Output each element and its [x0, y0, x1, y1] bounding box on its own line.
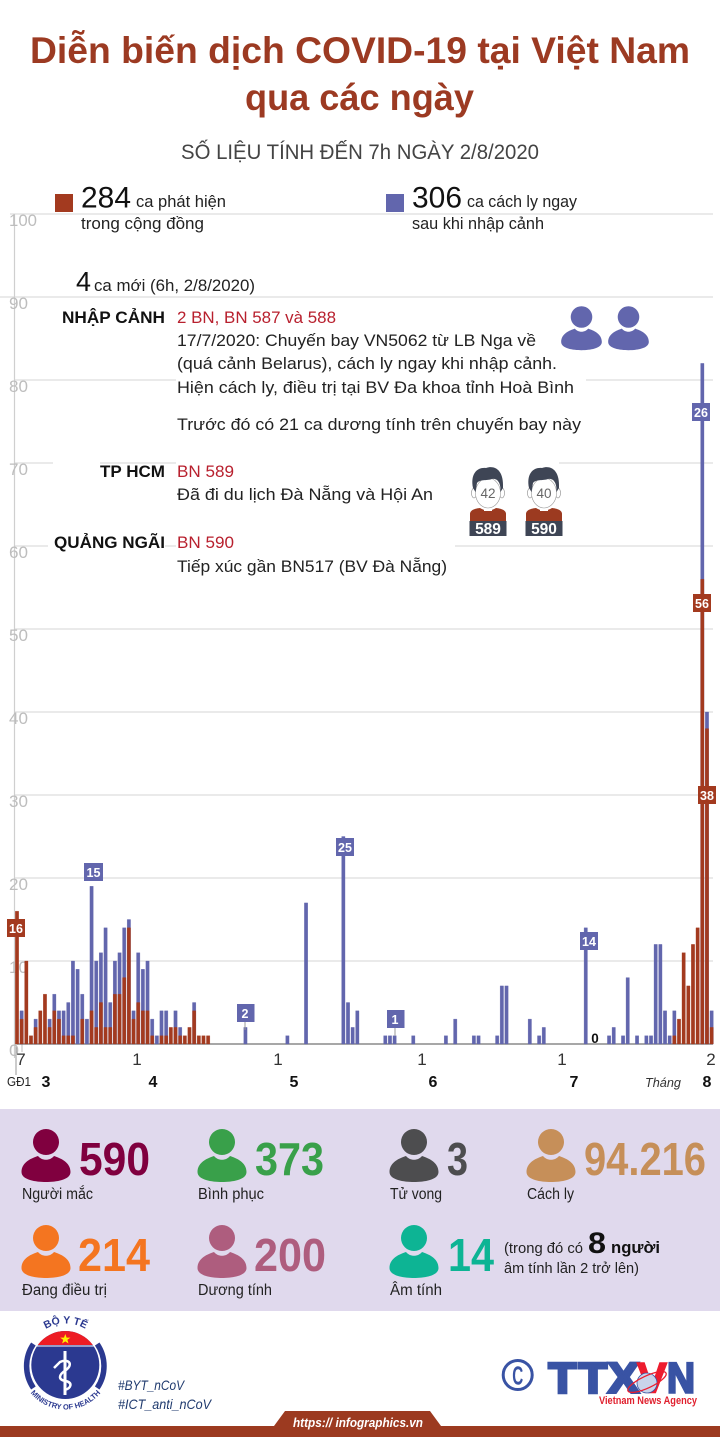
x axis day labels: 2 [706, 1050, 716, 1069]
block: Quang Ngai case: BN 590 [177, 533, 234, 552]
value tag: 26 [692, 403, 710, 421]
x axis month labels [7, 1074, 712, 1091]
legend: community cases: 284 [81, 182, 131, 214]
note: negative twice or more: (trong đó có [504, 1240, 583, 1257]
block: Ho Chi Minh City case: Đã đi du lịch Đà Nẵng và Hội An [177, 485, 433, 504]
x axis month labels: 6 [429, 1074, 438, 1091]
stat: quarantined [526, 1129, 706, 1203]
block: Ho Chi Minh City case [100, 462, 433, 504]
value tag: 15: 15 [87, 866, 100, 880]
stat: under treatment: 214 [78, 1229, 150, 1281]
logo: TTXVN copyright mark [503, 1360, 532, 1390]
note: negative twice or more: âm tính lần 2 trở lên) [504, 1260, 639, 1277]
value label: 0: 0 [591, 1031, 599, 1046]
block: imported cases: NHẬP CẢNH [62, 308, 165, 327]
new cases heading [76, 266, 255, 297]
legend: quarantined on arrival: 306 [412, 182, 462, 214]
logo: TTXVN: X [608, 1354, 639, 1402]
icon: patient 590: 40 [536, 486, 552, 501]
value tag: 25 [336, 838, 354, 856]
bars: quarantined on arrival (blue) [20, 363, 713, 1044]
block: imported cases: (quá cảnh Belarus), cách ly ngay khi nhập cảnh. [177, 354, 557, 373]
value tag: 15 [84, 863, 103, 881]
logo: TTXVN: Vietnam News Agency [599, 1395, 698, 1407]
x axis day labels [16, 1050, 716, 1069]
block: imported cases: 2 BN, BN 587 và 588 [177, 308, 336, 327]
legend: community cases: ca phát hiện [136, 192, 226, 211]
block: Quang Ngai case: Tiếp xúc gần BN517 (BV Đà Nẵng) [177, 557, 447, 576]
logo: TTXVN: V [637, 1354, 667, 1402]
stat: infected [22, 1129, 150, 1203]
stat: deaths: Tử vong [390, 1186, 442, 1203]
value tag: 56 [693, 594, 711, 612]
value tag: 1: 1 [392, 1013, 399, 1027]
value tag: 2: 2 [242, 1007, 249, 1021]
note: negative twice or more: người [611, 1238, 660, 1257]
x axis month labels: GĐ1 [7, 1075, 31, 1089]
y axis labels: 100 [9, 211, 37, 230]
new cases heading: 4 [76, 266, 91, 297]
icon: patient 589: 42 [480, 486, 496, 501]
logo: TTXVN copyright mark: C [512, 1360, 523, 1390]
y axis labels: 60 [9, 543, 28, 562]
legend: quarantined on arrival: ca cách ly ngay [467, 192, 577, 211]
y axis labels: 80 [9, 377, 28, 396]
new cases heading: ca mới (6h, 2/8/2020) [94, 276, 255, 295]
stat: recovered: Bình phục [198, 1186, 264, 1203]
stat: quarantined: Cách ly [527, 1186, 574, 1203]
logo: Ministry of Health [24, 1315, 107, 1410]
icon: patient 589 [470, 467, 506, 538]
x axis day labels: 1 [557, 1050, 567, 1069]
note: negative twice or more [504, 1227, 660, 1277]
stat: positive: 200 [254, 1229, 326, 1281]
y axis labels: 90 [9, 294, 28, 313]
bars: detected in community (red) [15, 579, 713, 1044]
value tag: 38: 38 [700, 789, 714, 803]
legend: community cases [55, 182, 226, 233]
value tag: 16 [7, 919, 25, 937]
value tag: 2 [237, 1004, 254, 1030]
footer bar [0, 1411, 720, 1437]
x axis month labels: 4 [149, 1074, 158, 1091]
block: Quang Ngai case: QUẢNG NGÃI [54, 532, 165, 552]
logo: TTXVN: T [548, 1354, 576, 1402]
baseline [17, 1043, 713, 1045]
value tag: 16: 16 [9, 922, 23, 936]
footer bar: https:// infographics.vn [293, 1415, 423, 1430]
icon: patient 590: 590 [531, 521, 557, 538]
icon: patient 589: 589 [475, 521, 501, 538]
x axis month labels: Tháng [645, 1075, 682, 1090]
title: qua các ngày [245, 77, 474, 118]
x axis day labels: 1 [273, 1050, 283, 1069]
x axis month labels: 7 [570, 1074, 579, 1091]
note: negative twice or more: 8 [588, 1227, 606, 1260]
legend: quarantined on arrival [386, 182, 577, 233]
stat: deaths [390, 1129, 468, 1203]
block: Ho Chi Minh City case: TP HCM [100, 462, 165, 481]
y axis labels: 40 [9, 709, 28, 728]
hashtags: #ICT_anti_nCoV [118, 1396, 212, 1412]
block: Ho Chi Minh City case: BN 589 [177, 462, 234, 481]
y axis labels [9, 211, 37, 1060]
icon: patient 590 [526, 467, 562, 538]
logo: TTXVN: N [667, 1354, 695, 1402]
y axis labels: 30 [9, 792, 28, 811]
stat: negative: 14 [448, 1229, 494, 1281]
stat: under treatment [22, 1225, 150, 1299]
stat: positive [198, 1225, 326, 1299]
x axis day labels: 1 [417, 1050, 427, 1069]
x axis day labels: 7 [16, 1050, 26, 1069]
stat: deaths: 3 [447, 1133, 468, 1185]
legend: community cases: trong cộng đồng [81, 214, 204, 233]
x axis month labels: 8 [703, 1074, 712, 1091]
hashtags: #BYT_nCoV [118, 1377, 185, 1393]
y axis labels: 0 [9, 1041, 19, 1060]
y axis labels: 50 [9, 626, 28, 645]
value tag: 1 [387, 1010, 404, 1036]
stat: positive: Dương tính [198, 1282, 272, 1299]
stat: recovered: 373 [255, 1133, 324, 1185]
logo: Ministry of Health: BỘ Y TẾ [43, 1315, 89, 1329]
title: Diễn biến dịch COVID-19 tại Việt Nam [30, 30, 690, 71]
x axis day labels: 1 [132, 1050, 142, 1069]
logo: TTXVN: T [579, 1354, 607, 1402]
block: imported cases: Trước đó có 21 ca dương tính trên chuyến bay này [177, 415, 582, 434]
value tag: 56: 56 [695, 597, 709, 611]
stat: infected: 590 [79, 1133, 150, 1185]
block: Quang Ngai case [54, 532, 447, 576]
chart grid lines and y axis [0, 214, 713, 1075]
hashtags [118, 1377, 212, 1412]
icon: two imported patients [561, 306, 649, 350]
block: imported cases [62, 308, 582, 434]
stat: negative [390, 1225, 494, 1299]
legend: quarantined on arrival: sau khi nhập cảnh [412, 214, 544, 233]
value tag: 25: 25 [338, 841, 352, 855]
y axis labels: 20 [9, 875, 28, 894]
title [30, 30, 690, 118]
block: imported cases: Hiện cách ly, điều trị tại BV Đa khoa tỉnh Hoà Bình [177, 378, 574, 397]
stat: infected: Người mắc [22, 1186, 93, 1203]
x axis month labels: 3 [42, 1074, 51, 1091]
value tag: 14 [580, 932, 598, 950]
y axis labels: 10 [9, 958, 28, 977]
value tag: 14: 14 [582, 935, 596, 949]
y axis labels: 70 [9, 460, 28, 479]
value tag: 38 [698, 786, 716, 804]
panel: totals [0, 1109, 720, 1311]
chart: daily cases [0, 211, 716, 1091]
logo: TTXVN [548, 1354, 698, 1407]
logo: Ministry of Health: MINISTRY OF HEALTH [30, 1390, 100, 1410]
stat: recovered [198, 1129, 324, 1203]
subtitle: SỐ LIỆU TÍNH ĐẾN 7h NGÀY 2/8/2020 [181, 140, 539, 164]
block: imported cases: 17/7/2020: Chuyến bay VN5062 từ LB Nga về [177, 331, 536, 350]
x axis month labels: 5 [290, 1074, 299, 1091]
stat: under treatment: Đang điều trị [22, 1282, 107, 1299]
value tag: 26: 26 [694, 406, 708, 420]
stat: negative: Âm tính [390, 1282, 442, 1299]
